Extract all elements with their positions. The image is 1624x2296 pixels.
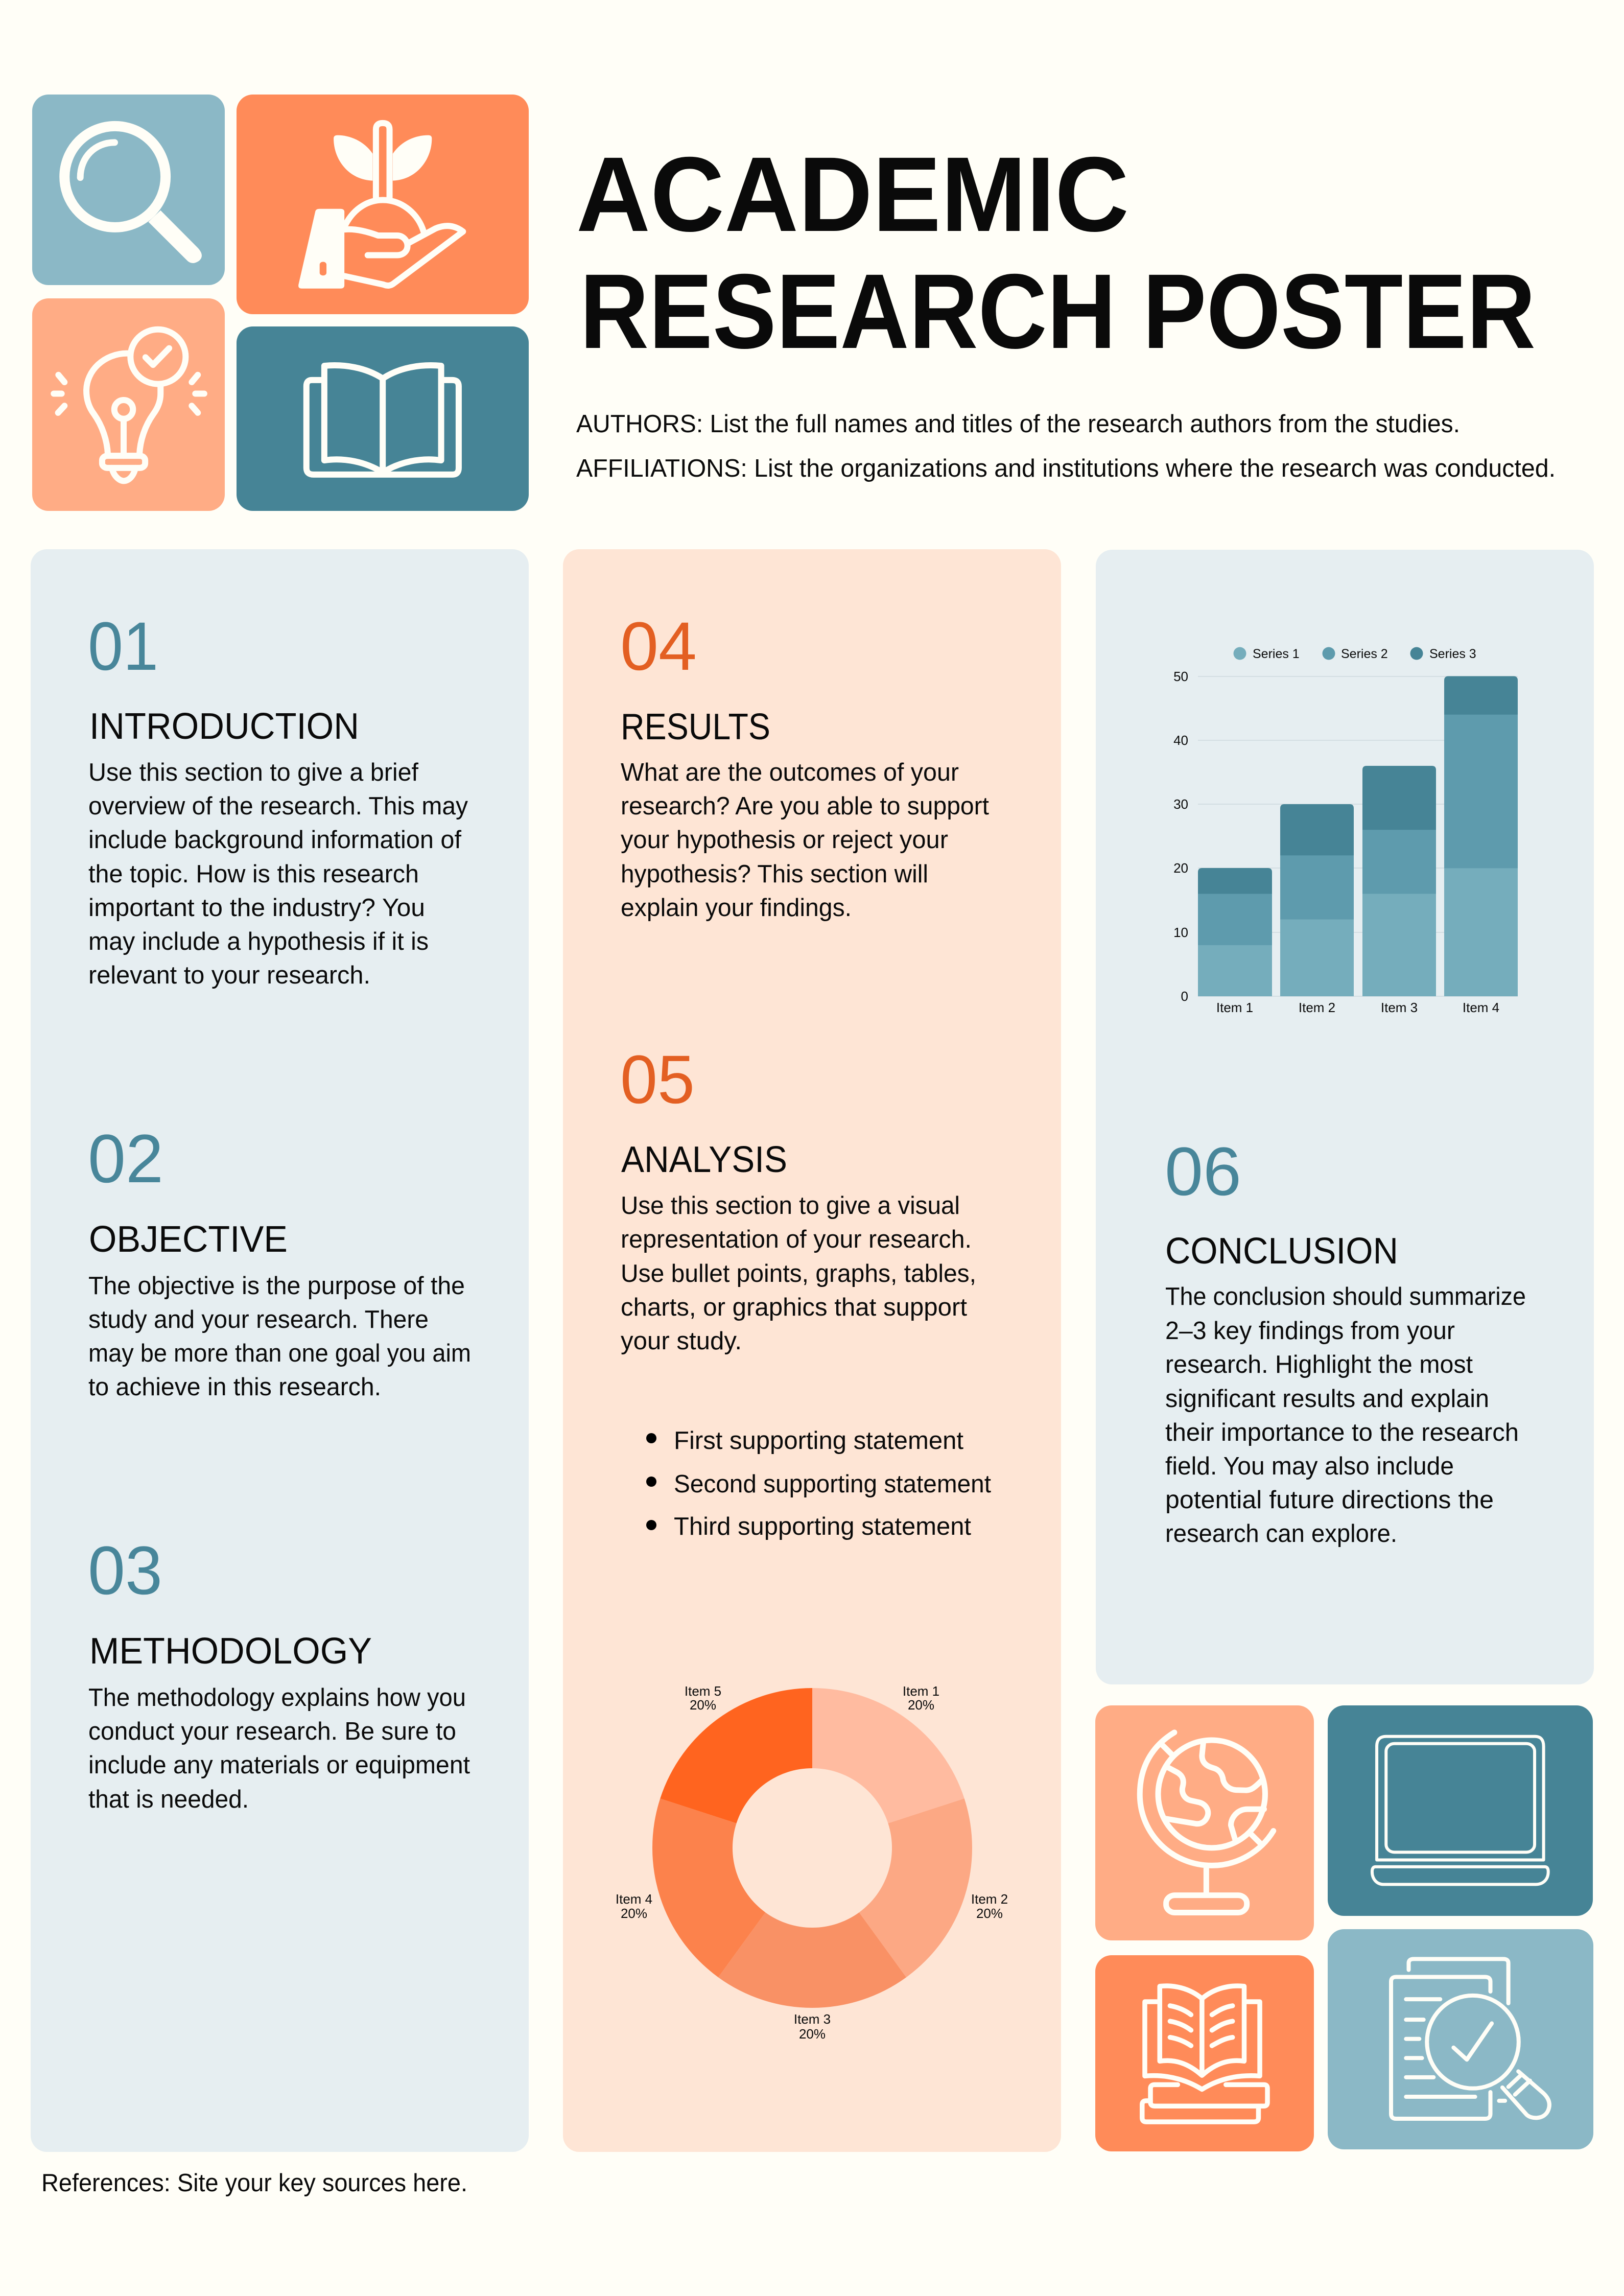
section 06 conclusion: research. Highlight the most [1165,1351,1473,1378]
section 06 conclusion: potential future directions the [1165,1486,1494,1514]
bars item 4 [1444,676,1518,996]
icon: globe [1140,1732,1274,1913]
section 01 introduction: the topic. How is this research [88,860,419,888]
donut chart: 20% [799,2026,826,2042]
section 06 conclusion: CONCLUSION [1165,1231,1398,1272]
x axis labels: Item 4 [1463,1000,1499,1015]
section 02 objective: 02 [88,1121,163,1197]
x axis labels: Item 1 [1216,1000,1253,1015]
bars item 2 [1280,804,1354,996]
donut chart: 20% [690,1697,716,1713]
title [576,135,1536,371]
x axis labels: Item 3 [1381,1000,1418,1015]
section 06 conclusion: The conclusion should summarize [1165,1283,1526,1310]
x axis labels: Item 2 [1299,1000,1335,1015]
section 05 analysis: 05 [620,1042,695,1118]
icon: plant in hand [298,123,463,289]
chart legend [1233,647,1476,661]
icon: magnifying glass [64,126,202,263]
footer icon tiles [1095,1705,1593,2151]
icon: light bulb with check [54,330,204,481]
section 06 conclusion: research can explore. [1165,1520,1397,1548]
authors and affiliations: AFFILIATIONS: List the organizations and institutions where the research was conducted. [576,455,1556,482]
authors and affiliations: AUTHORS: List the full names and titles of the research authors from the studies. [576,410,1460,438]
donut chart: Item 4 [616,1891,652,1907]
donut chart: Item 5 [685,1683,721,1699]
donut chart: Item 3 [794,2011,831,2027]
section 01 introduction: overview of the research. This may [88,792,468,820]
section 03 methodology: METHODOLOGY [89,1631,372,1672]
donut chart: 20% [976,1906,1003,1921]
bullet list: Third supporting statement [674,1513,971,1540]
section 05 analysis [620,1042,976,1355]
section 06 conclusion: their importance to the research [1165,1419,1519,1446]
section 01 introduction [88,608,468,989]
donut chart: Item 1 [903,1683,939,1699]
section 04 results: What are the outcomes of your [621,759,959,786]
section 02 objective: to achieve in this research. [88,1373,381,1401]
chart legend: Series 2 [1341,647,1388,661]
bars item 3 [1362,766,1436,996]
y axis labels: 20 [1173,860,1188,876]
tile: plant in hand background [237,95,529,314]
tile: laptop background [1328,1705,1593,1916]
tile: globe background [1095,1705,1314,1940]
section 06 conclusion: significant results and explain [1165,1385,1489,1413]
section 03 methodology: 03 [88,1533,162,1609]
section 03 methodology: that is needed. [88,1786,249,1813]
section 03 methodology: conduct your research. Be sure to [88,1718,456,1745]
section 01 introduction: INTRODUCTION [89,706,359,747]
tile: light bulb background [32,298,225,511]
bullet list: Second supporting statement [674,1470,991,1498]
references: References: Site your key sources here. [41,2169,467,2197]
section 05 analysis: your study. [621,1327,742,1355]
authors and affiliations [576,410,1556,482]
section 05 analysis: Use this section to give a visual [621,1192,960,1220]
section 01 introduction: include background information of [88,826,461,854]
y axis labels [1173,669,1188,1004]
y axis labels: 50 [1173,669,1188,684]
tile: magnifier background [32,95,225,285]
panel: right column [1096,550,1594,1684]
section 03 methodology [88,1533,470,1813]
panel: left column [31,549,529,2152]
section 01 introduction: Use this section to give a brief [88,759,418,786]
section 01 introduction: relevant to your research. [88,962,370,989]
panel background [31,549,529,2152]
bars item 1 [1198,868,1272,996]
section 06 conclusion: 06 [1165,1134,1241,1210]
section 04 results: your hypothesis or reject your [621,826,948,854]
section 04 results: 04 [620,608,697,685]
chart legend: Series 3 [1429,647,1476,661]
section 01 introduction: 01 [88,608,158,685]
section 06 conclusion [1165,1134,1526,1548]
section 04 results: research? Are you able to support [621,792,989,820]
panel background [563,549,1061,2152]
tile: books background [1095,1955,1314,2151]
section 02 objective: OBJECTIVE [89,1219,288,1260]
section 02 objective: study and your research. There [88,1306,429,1333]
title: ACADEMIC [576,135,1129,254]
icon: stack of books [1142,1986,1267,2122]
section 05 analysis: ANALYSIS [621,1139,787,1180]
y axis labels: 10 [1173,925,1188,940]
donut chart: 20% [908,1697,934,1713]
section 06 conclusion: 2–3 key findings from your [1165,1317,1455,1345]
chart legend: Series 1 [1253,647,1300,661]
y axis labels: 0 [1181,989,1188,1004]
header icon tiles [32,95,529,511]
section 03 methodology: The methodology explains how you [88,1684,466,1712]
donut chart: Item 2 [971,1891,1008,1907]
section 01 introduction: may include a hypothesis if it is [88,928,429,955]
section 05 analysis: Use bullet points, graphs, tables, [621,1260,976,1287]
donut chart: 20% [621,1906,647,1921]
section 06 conclusion: field. You may also include [1165,1452,1454,1480]
title: RESEARCH POSTER [580,252,1536,371]
icon: laptop [1372,1737,1548,1884]
section 04 results: explain your findings. [621,894,852,922]
section 05 analysis: charts, or graphics that support [621,1294,967,1321]
bullet list: First supporting statement [674,1427,963,1455]
section 02 objective [88,1121,471,1401]
section 04 results: hypothesis? This section will [621,860,928,888]
icon: open book [307,365,459,475]
panel background [1096,550,1594,1684]
bullet list [646,1427,991,1540]
stacked bar chart [1173,647,1518,1015]
tile: document review background [1328,1929,1593,2149]
section 02 objective: may be more than one goal you aim [88,1340,471,1367]
y axis labels: 30 [1173,796,1188,812]
y axis labels: 40 [1173,733,1188,748]
x axis labels [1216,1000,1499,1015]
section 01 introduction: important to the industry? You [88,894,425,922]
icon: document with magnifier [1391,1959,1549,2119]
section 02 objective: The objective is the purpose of the [88,1272,465,1300]
section 04 results [620,608,989,922]
tile: open book background [237,326,529,511]
panel: middle column [563,549,1061,2152]
section 05 analysis: representation of your research. [621,1226,972,1253]
donut chart [616,1683,1008,2042]
section 03 methodology: include any materials or equipment [88,1751,470,1779]
section 04 results: RESULTS [621,707,770,747]
